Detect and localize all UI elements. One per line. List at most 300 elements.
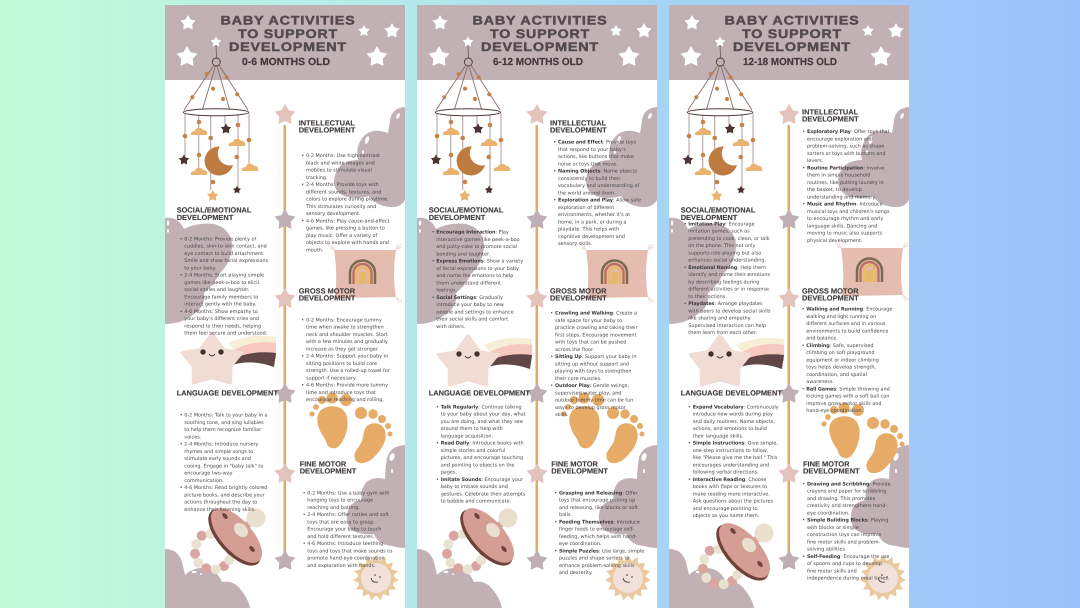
panel: 6-12 months <box>417 5 660 608</box>
list: fine motor: and drawing. This promotes <box>807 496 876 502</box>
list: gross motor: with toys that can be pushed <box>555 340 626 346</box>
list: fine motor: : Playing <box>868 518 889 524</box>
illustration: sun <box>855 546 915 607</box>
list: gross motor: outdoor tummy time can be fun <box>555 398 633 404</box>
list: social/emotional: by describing feelings during <box>688 279 759 285</box>
list: intellectual: environments, whether it's at <box>558 212 630 218</box>
heading: intellectual: DEVELOPMENT <box>802 115 859 124</box>
header band with stars <box>669 5 909 80</box>
list: language: • <box>688 477 691 483</box>
title <box>472 14 608 54</box>
list: language: : Give simple, <box>744 441 778 447</box>
list: language: objects as you name them. <box>693 513 760 519</box>
list: gross motor: • <box>301 317 304 323</box>
list: fine motor: toys that are easy to grasp. <box>307 519 375 525</box>
list: fine motor: eye coordination. <box>559 541 602 547</box>
list: social/emotional: eye contact to build attachment. <box>184 251 265 257</box>
list: social/emotional: • <box>684 301 687 307</box>
list: social/emotional: cuddles, skin-to-skin contact, and <box>184 244 267 250</box>
list: intellectual: colors to explore during playtime. <box>306 196 389 202</box>
list: gross motor: sitting positions to build core <box>306 361 377 367</box>
list: social/emotional: introduce your baby to new <box>436 302 504 308</box>
heading: social/emotional: DEVELOPMENT <box>681 213 738 222</box>
heading: social/emotional: SOCIAL/EMOTIONAL <box>429 205 504 214</box>
heading: social/emotional: DEVELOPMENT <box>429 213 486 222</box>
list: language: • <box>436 404 439 410</box>
illustration: shooting star <box>183 334 276 383</box>
list: intellectual: Exploratory Play <box>807 129 852 135</box>
list: gross motor: increase as they get stronger. <box>306 346 379 352</box>
list: intellectual: physical development. <box>807 238 863 244</box>
list: intellectual: 0-2 Months: Use high-contrast <box>306 153 380 159</box>
list: fine motor: balls. <box>559 512 572 518</box>
list: language: pages. <box>441 470 457 476</box>
list: fine motor: 4-6 Months: Introduce teething <box>307 541 383 547</box>
heading: fine motor: DEVELOPMENT <box>300 466 357 475</box>
list: social/emotional: supports role-playing but also <box>688 250 761 256</box>
list: intellectual: 2-4 Months: Provide toys with <box>306 182 379 188</box>
heading: intellectual: INTELLECTUAL <box>550 118 607 127</box>
list: intellectual: play music. Offer a variety of <box>306 233 377 239</box>
list: social/emotional: • <box>432 259 435 265</box>
list: gross motor: walking and light running on <box>806 314 876 320</box>
list: fine motor: promote hand-eye coordination <box>307 556 385 562</box>
list: gross motor: supervised water play, and <box>555 390 621 396</box>
list: fine motor: 2-4 Months: Offer rattles and soft <box>307 512 389 518</box>
list: language: soothing tone, and sing lullabies <box>184 420 264 426</box>
list: social/emotional: : Arrange playdates <box>714 301 763 307</box>
list: intellectual: • <box>802 129 805 135</box>
list: language: introduce new words during play <box>693 412 773 418</box>
list: gross motor: : Gentle swings, <box>590 383 629 389</box>
list: intellectual: • <box>553 169 556 175</box>
list: social/emotional: : Show a variety <box>484 259 523 265</box>
title: BABY ACTIVITIES <box>724 14 860 28</box>
list: social/emotional: • <box>180 309 183 315</box>
list: language: one-step instructions to follow, <box>693 448 769 454</box>
list: fine motor: reaching and batting. <box>307 505 360 511</box>
list: language: make reading more interactive. <box>693 491 770 497</box>
list: intellectual: encourage exploration and <box>807 136 873 142</box>
list: social/emotional: them learn from each other. <box>688 330 757 336</box>
list: intellectual: : Allow safe <box>613 198 641 204</box>
age subtitle: 6-12 MONTHS OLD <box>493 57 583 68</box>
list: fine motor: solving abilities. <box>807 547 847 553</box>
list: intellectual: to encourage rhythm and early <box>807 216 883 222</box>
list: social/emotional: identify and name their emotions <box>688 272 770 278</box>
list: social/emotional: pretending to cook, clean, or talk <box>688 236 770 242</box>
heading: fine motor: FINE MOTOR <box>803 459 850 468</box>
list: language: books with flaps or textures to <box>693 484 767 490</box>
list: social/emotional: Playdates <box>688 301 715 307</box>
list: gross motor: : Support your baby in <box>582 354 636 360</box>
illustration: shooting star <box>691 336 784 385</box>
list: social/emotional: their social skills and comfort <box>436 317 508 323</box>
list: intellectual: routines, like putting laundry in <box>807 180 884 186</box>
list: intellectual: sensory skills. <box>558 241 593 247</box>
age subtitle: 12-18 MONTHS OLD <box>743 57 837 68</box>
list: language: • <box>688 404 691 410</box>
heading: language: LANGUAGE DEVELOPMENT <box>177 389 278 398</box>
list: language: cooing. Engage in "baby talk" to <box>184 463 263 469</box>
list: gross motor: awareness. <box>806 379 834 385</box>
list: language: Read Daily <box>441 441 470 447</box>
list: language: stimulate early sounds and <box>184 456 251 462</box>
list: fine motor: • <box>802 554 805 560</box>
list: fine motor: 0-2 Months: Use a baby gym with <box>307 490 390 496</box>
illustration: baby mobile <box>683 45 762 201</box>
list: social/emotional: games like peek-a-boo to elicit <box>184 280 260 286</box>
list: social/emotional: bonding and laughter. <box>436 251 491 257</box>
list: intellectual: different sounds, textures, and <box>306 189 381 195</box>
heading: gross motor: GROSS MOTOR <box>299 286 356 295</box>
list: language: following verbal directions. <box>693 470 759 476</box>
list: intellectual: This stimulates curiosity and <box>305 204 376 210</box>
illustration: baby mobile <box>179 45 258 201</box>
list: fine motor: and dexterity. <box>559 570 593 576</box>
list: fine motor: Drawing and Scribbling <box>807 481 870 487</box>
list: social/emotional: • <box>180 236 183 242</box>
list: language: and encourage pointing to <box>693 506 758 512</box>
list: intellectual: Music and Rhythm <box>807 202 856 208</box>
list: intellectual: : Introduce <box>856 202 883 208</box>
list: fine motor: crayons and paper for scribbling <box>807 489 886 495</box>
list: language: encourage two-way <box>184 471 233 477</box>
list: gross motor: sitting up without support and <box>555 361 629 367</box>
list: intellectual: levers. <box>807 158 824 164</box>
list: language: Ask questions about the pictures <box>693 499 774 505</box>
list: intellectual: • <box>553 140 556 146</box>
list: gross motor: Outdoor Play <box>555 383 591 389</box>
illustration: pillow <box>580 244 654 303</box>
list: social/emotional: like sharing and empathy. <box>688 316 752 322</box>
list: fine motor: puzzles and shape sorters to <box>559 556 629 562</box>
list: gross motor: 2-4 Months: Support your baby in <box>306 354 388 360</box>
list: language: enhance their listening skills. <box>184 507 256 513</box>
list: fine motor: finger foods to encourage self- <box>559 527 634 533</box>
list: intellectual: Naming Objects <box>558 169 600 175</box>
panel: 12-18 months <box>669 5 915 608</box>
list: gross motor: • <box>550 311 553 317</box>
list: language: baby to imitate sounds and <box>441 484 508 490</box>
timeline with stars <box>275 104 295 570</box>
heading: social/emotional: DEVELOPMENT <box>177 213 234 222</box>
list: gross motor: with a few minutes and gradually <box>306 339 388 345</box>
list: intellectual: problem-solving, such as shape <box>807 144 884 150</box>
list: language: : Introduce books with <box>469 441 524 447</box>
list: gross motor: time and introduce toys that <box>306 390 376 396</box>
list: language: 4-6 Months: Read brightly colored <box>184 485 267 491</box>
list: fine motor: Simple Puzzles <box>559 548 599 554</box>
list: gross motor: different surfaces and in various <box>806 321 886 327</box>
list: intellectual: consistently to build their <box>558 176 621 182</box>
list: intellectual: sensory development. <box>306 211 361 217</box>
list: social/emotional: Smile and show facial expressions <box>184 258 268 264</box>
list: fine motor: • <box>554 519 557 525</box>
list: language: and pointing to objects on the <box>441 462 514 468</box>
list: language: to help them recognize familiar <box>184 427 262 433</box>
heading: language: LANGUAGE DEVELOPMENT <box>681 388 782 397</box>
list: fine motor: Feeding Themselves <box>559 519 614 525</box>
heading: intellectual: DEVELOPMENT <box>550 126 607 134</box>
list: language: • <box>436 477 439 483</box>
illustration: baby feet <box>561 392 644 463</box>
list: social/emotional: • <box>180 273 183 279</box>
list: intellectual: • <box>802 202 805 208</box>
list: gross motor: their core muscles. <box>555 376 602 382</box>
list: gross motor: support if necessary. <box>306 375 357 381</box>
list: intellectual: the basket, to develop <box>807 187 862 193</box>
list: social/emotional: 0-2 Months: Provide plenty of <box>184 236 257 242</box>
list: social/emotional: : Encourage <box>725 221 755 227</box>
list: fine motor: • <box>303 541 306 547</box>
list: gross motor: and balance. <box>806 336 838 342</box>
list: social/emotional: and name the emotions to help <box>436 273 513 279</box>
list: intellectual: musical toys and children's songs <box>807 209 890 215</box>
list: language: : Continue talking <box>478 404 522 410</box>
list: fine motor: • <box>802 481 805 487</box>
list: social/emotional: to their actions. <box>688 294 727 300</box>
heading: language: LANGUAGE DEVELOPMENT <box>429 388 530 397</box>
list: intellectual: noise or toys that move. <box>558 161 618 167</box>
list: social/emotional: Encourage Interaction <box>436 230 496 236</box>
list: intellectual: : Offer toys that <box>851 129 890 135</box>
list: language: rhymes and simple songs to <box>184 449 253 455</box>
illustration: sun <box>348 546 408 607</box>
list: intellectual: that respond to your baby's <box>558 147 626 153</box>
heading: fine motor: FINE MOTOR <box>300 459 347 468</box>
list: fine motor: : Encourage the use <box>840 554 889 560</box>
list: gross motor: toys helps develop strength, <box>806 365 877 371</box>
heading: gross motor: DEVELOPMENT <box>299 293 356 302</box>
illustration: pillow <box>835 242 909 301</box>
list: gross motor: playing with toys to strengthen <box>555 369 631 375</box>
header band with stars <box>165 5 405 80</box>
list: social/emotional: : Gradually <box>476 295 503 301</box>
list: social/emotional: feelings. <box>436 288 458 294</box>
list: fine motor: and hold different textures. <box>307 534 375 540</box>
list: language: • <box>436 441 439 447</box>
list: social/emotional: on the phone. This not only <box>688 243 756 249</box>
heading: gross motor: DEVELOPMENT <box>550 293 607 302</box>
heading: gross motor: DEVELOPMENT <box>802 293 859 302</box>
list: gross motor: : Safe, supervised <box>830 343 874 349</box>
list: language: their language skills. <box>693 433 744 439</box>
list: intellectual: tracking. <box>306 175 328 181</box>
list: language: actions, and emotions to build <box>693 426 767 432</box>
list: fine motor: and releasing, like blocks or soft <box>559 505 638 511</box>
list: language: : Encourage your <box>481 477 524 483</box>
list: gross motor: 4-6 Months: Provide more tummy <box>306 383 388 389</box>
list: intellectual: • <box>553 198 556 204</box>
list: social/emotional: : Help them <box>737 265 766 271</box>
illustration: shooting star <box>439 336 532 385</box>
list: gross motor: neck and shoulder muscles. Start <box>306 332 388 338</box>
list: fine motor: construction toys can improve <box>807 532 881 538</box>
list: social/emotional: enhances social understanding. <box>688 258 766 264</box>
list: fine motor: feeding, which helps with hand- <box>559 534 637 540</box>
list: fine motor: with blocks or simple <box>807 525 859 531</box>
header band with stars <box>417 5 657 80</box>
list: language: actions throughout the day to <box>184 500 257 506</box>
list: gross motor: Sitting Up <box>555 354 582 360</box>
list: social/emotional: them feel secure and understood. <box>184 331 268 337</box>
list: gross motor: environments to build confidence <box>806 328 888 334</box>
list: language: 0-2 Months: Talk to your baby in a <box>184 413 268 419</box>
list: intellectual: : Involve <box>863 165 884 171</box>
list: gross motor: kicking games with a soft ball can <box>806 394 889 400</box>
title <box>220 14 356 54</box>
list: fine motor: : Introduce <box>613 519 640 525</box>
list: gross motor: • <box>550 383 553 389</box>
list: language: simple stories and colorful <box>441 448 505 454</box>
heading: social/emotional: SOCIAL/EMOTIONAL <box>681 205 756 214</box>
list: fine motor: : Use large, simple <box>599 548 644 554</box>
list: intellectual: language skills. Dancing and <box>807 223 877 229</box>
list: social/emotional: • <box>432 295 435 301</box>
list: fine motor: fine motor skills and <box>807 568 857 574</box>
list: intellectual: Exploration and Play <box>558 198 614 204</box>
list: intellectual: exploration of different <box>558 205 614 211</box>
list: gross motor: across the floor. <box>555 347 594 353</box>
title: TO SUPPORT <box>490 27 590 41</box>
list: gross motor: first steps. Encourage movement <box>555 332 637 338</box>
list: language: encourages understanding and <box>693 462 769 468</box>
list: social/emotional: with peers to develop social skills <box>688 308 771 314</box>
list: language: pictures, and encourage touching <box>441 455 523 461</box>
list: intellectual: understanding and memory. <box>807 194 877 200</box>
list: language: : Continuously <box>744 404 779 410</box>
list: social/emotional: people and settings to enhance <box>436 309 514 315</box>
list: gross motor: ways to develop gross motor <box>555 405 627 411</box>
list: social/emotional: Imitation Play <box>688 221 726 227</box>
list: social/emotional: social smiles and laughter. <box>184 287 250 293</box>
title <box>724 14 860 54</box>
list: intellectual: : Provide toys <box>603 140 637 146</box>
list: gross motor: climbing on soft playground <box>806 350 875 356</box>
list: fine motor: creativity and strengthens hand- <box>807 503 887 509</box>
list: social/emotional: your baby's different cries and <box>184 316 259 322</box>
list: language: to your baby about your day, what <box>441 412 526 418</box>
list: language: to babble and communicate. <box>441 499 512 505</box>
list: fine motor: hanging toys to encourage <box>307 498 373 504</box>
list: social/emotional: • <box>684 265 687 271</box>
list: social/emotional: Emotional Naming <box>688 265 738 271</box>
illustration: sun <box>600 546 660 607</box>
list: gross motor: encourage reaching and rolling. <box>306 397 384 403</box>
list: fine motor: : Offer <box>622 490 639 496</box>
list: intellectual: Routine Participation <box>807 165 864 171</box>
list: fine motor: : Provide <box>869 481 891 487</box>
list: gross motor: • <box>802 386 805 392</box>
list: gross motor: • <box>802 343 805 349</box>
list: intellectual: sorters or toys with buttons and <box>807 151 885 157</box>
list: language: Expand Vocabulary <box>693 404 745 410</box>
list: social/emotional: Social Settings <box>436 295 476 301</box>
list: intellectual: : Name objects <box>600 169 638 175</box>
list: social/emotional: to your baby. <box>184 265 217 271</box>
list: gross motor: Climbing <box>806 343 830 349</box>
heading: gross motor: GROSS MOTOR <box>802 286 859 295</box>
list: social/emotional: imitation games, such as <box>688 229 750 235</box>
list: language: : Choose <box>745 477 766 483</box>
illustration: pacifier <box>698 515 779 589</box>
list: language: picture books, and describe your <box>184 492 266 498</box>
list: fine motor: • <box>303 512 306 518</box>
list: fine motor: • <box>554 548 557 554</box>
list: fine motor: • <box>554 490 557 496</box>
list: gross motor: • <box>301 354 304 360</box>
list: language: gestures. Celebrate their attempts <box>441 491 526 497</box>
illustration: pacifier <box>190 500 271 574</box>
list: fine motor: Simple Building Blocks <box>807 518 868 524</box>
list: gross motor: • <box>802 307 805 313</box>
list: gross motor: : Create a <box>613 311 637 317</box>
list: fine motor: • <box>303 490 306 496</box>
list: fine motor: toys that encourage picking up <box>559 498 635 504</box>
list: intellectual: • <box>301 153 304 159</box>
list: social/emotional: • <box>432 230 435 236</box>
list: intellectual: black and white images and <box>306 160 375 166</box>
list: intellectual: games, like pressing a button to <box>306 226 385 232</box>
heading: intellectual: DEVELOPMENT <box>299 125 356 134</box>
heading: intellectual: INTELLECTUAL <box>299 118 355 127</box>
list: language: voices. <box>184 434 202 440</box>
title: DEVELOPMENT <box>733 40 851 54</box>
list: intellectual: actions, like buttons that make <box>558 154 634 160</box>
illustration: baby feet <box>309 392 392 463</box>
list: intellectual: Cause and Effect <box>558 140 604 146</box>
title: BABY ACTIVITIES <box>472 14 608 28</box>
list: intellectual: them in simple household <box>807 172 870 178</box>
list: intellectual: • <box>301 182 304 188</box>
list: social/emotional: interactive games like peek-a-boo <box>436 237 520 243</box>
list: intellectual: the world around them. <box>558 190 616 196</box>
list: intellectual: cognitive development and <box>558 234 625 240</box>
list: gross motor: 0-2 Months: Encourage tummy <box>306 317 382 323</box>
list: language: around them to help with <box>441 426 503 432</box>
heading: fine motor: DEVELOPMENT <box>551 466 608 475</box>
illustration: baby feet <box>821 402 904 473</box>
list: social/emotional: Encourage family members to <box>184 294 258 300</box>
list: fine motor: Grasping and Releasing <box>559 490 623 496</box>
list: social/emotional: Supervised interaction can help <box>688 323 766 329</box>
list: gross motor: Crawling and Walking <box>555 311 614 317</box>
list: social/emotional: with others. <box>436 324 466 330</box>
list: social/emotional: 2-4 Months: Start playing simple <box>184 273 264 279</box>
list: fine motor: independence during meal times. <box>807 576 890 582</box>
list: social/emotional: of facial expressions to your baby <box>436 266 519 272</box>
list: gross motor: equipment or indoor climbing <box>806 357 879 363</box>
title: DEVELOPMENT <box>229 40 347 54</box>
list: fine motor: toys and toys that make sounds to <box>307 548 392 554</box>
list: fine motor: of spoons and cups to develop <box>807 561 882 567</box>
list: language: Simple Instructions <box>693 441 745 447</box>
list: social/emotional: Express Emotions <box>436 259 484 265</box>
list: intellectual: • <box>802 165 805 171</box>
heading: intellectual: INTELLECTUAL <box>802 108 859 117</box>
list: social/emotional: respond to their needs, helping <box>184 323 261 329</box>
list: gross motor: coordination, and spatial <box>806 372 867 378</box>
illustration: baby mobile <box>431 45 510 201</box>
list: social/emotional: them understand different <box>436 280 501 286</box>
list: gross motor: hand-eye coordination. <box>806 408 863 414</box>
list: gross motor: time when awake to strengthen <box>306 325 384 331</box>
title: BABY ACTIVITIES <box>220 14 356 28</box>
list: language: • <box>180 442 183 448</box>
list: fine motor: • <box>802 518 805 524</box>
list: language: • <box>180 485 183 491</box>
